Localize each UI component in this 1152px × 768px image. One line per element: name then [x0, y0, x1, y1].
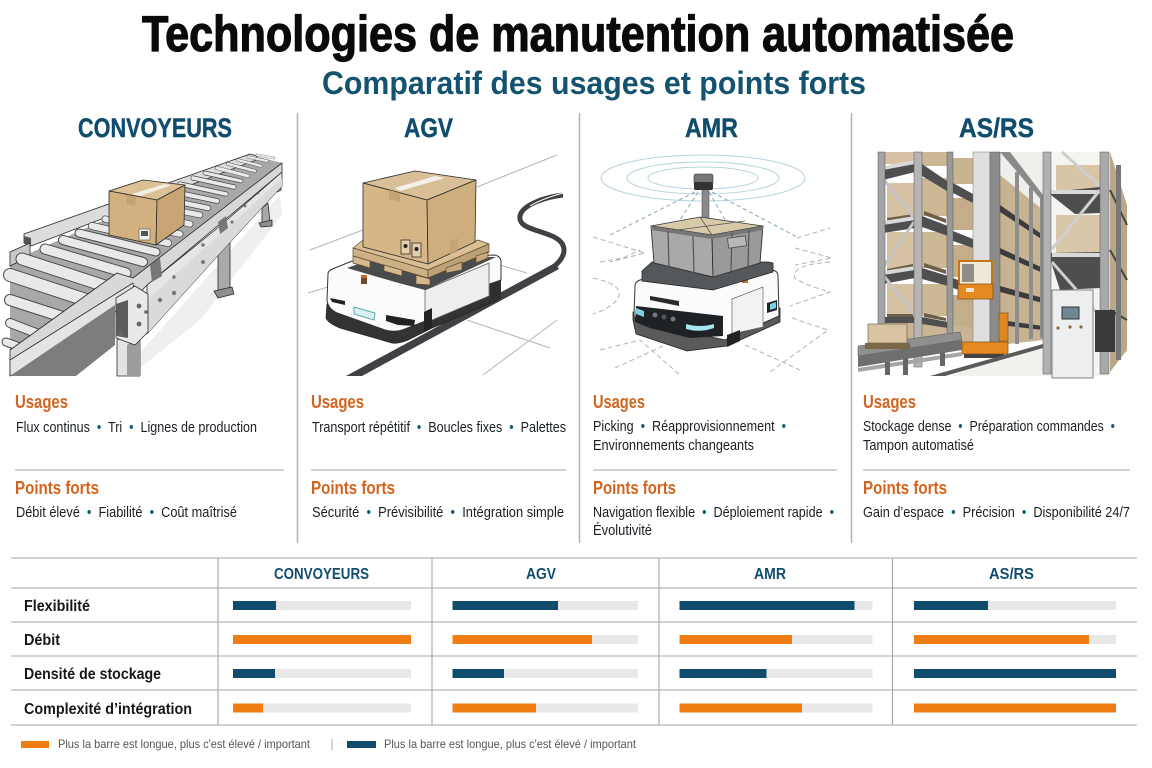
title: Technologies de manutention automatisée	[142, 6, 1014, 62]
cardboard box on pallet	[363, 171, 476, 264]
usages list: Stockage dense • Préparation commandes •	[863, 419, 1115, 435]
table header: agv: AGV	[526, 566, 557, 583]
usages list: Transport répétitif • Boucles fixes • Palettes	[312, 420, 566, 436]
wooden pallet	[353, 240, 489, 285]
legend swatch: navy	[347, 741, 376, 748]
mast	[973, 152, 1000, 347]
usages list line 2: Environnements changeants	[593, 438, 754, 454]
points forts heading: Points forts	[15, 478, 99, 498]
panel: as/rs	[858, 113, 1130, 521]
platform	[642, 262, 773, 290]
pallet load	[865, 324, 910, 349]
points forts list line 2: Évolutivité	[593, 522, 652, 539]
bar chart: agv	[452, 601, 638, 712]
lidar sensor	[694, 174, 713, 220]
control cabinet	[1052, 290, 1093, 378]
orange shuttle base	[962, 313, 1008, 358]
panel: agv	[308, 113, 566, 521]
comparison table	[11, 558, 1137, 725]
cardboard box	[109, 180, 185, 245]
heading: agv: AGV	[404, 113, 453, 143]
illustration: agv with pallet	[308, 155, 564, 376]
table header: amr: AMR	[754, 566, 786, 583]
usages heading: Usages	[593, 392, 645, 412]
legend text: navy: Plus la barre est longue, plus c'est élevé / important	[384, 737, 637, 751]
table header: convoyeurs: CONVOYEURS	[274, 566, 369, 583]
points forts heading: Points forts	[311, 478, 395, 498]
panel: convoyeurs	[6, 113, 284, 521]
usages heading: Usages	[311, 392, 364, 412]
points forts list: Gain d’espace • Précision • Disponibilité 24/7	[863, 505, 1130, 521]
table header: as/rs: AS/RS	[989, 566, 1034, 583]
points forts heading: Points forts	[863, 478, 947, 498]
points forts list: Sécurité • Prévisibilité • Intégration simple	[312, 505, 564, 521]
bar chart: convoyeurs	[233, 601, 411, 712]
braces	[884, 180, 914, 314]
bracket	[116, 286, 148, 345]
robot body	[633, 270, 780, 351]
guide track	[346, 193, 564, 376]
panel: amr	[593, 113, 837, 539]
near rail	[10, 163, 282, 376]
illustration: amr with lidar	[593, 155, 832, 375]
infeed conveyor	[858, 332, 1043, 376]
rollers	[6, 155, 274, 347]
legend text: orange: Plus la barre est longue, plus c'est élevé / important	[58, 737, 311, 751]
legend swatch: orange	[21, 741, 49, 748]
usages list: Picking • Réapprovisionnement •	[593, 419, 786, 435]
row label: densité de stockage: Densité de stockage	[24, 666, 161, 683]
heading: convoyeurs: CONVOYEURS	[78, 113, 232, 143]
bar chart: amr	[680, 601, 872, 712]
points forts list: Débit élevé • Fiabilité • Coût maîtrisé	[16, 505, 237, 521]
illustration: automated storage rack	[858, 152, 1127, 378]
side plate	[147, 172, 282, 334]
left rack boxes	[885, 152, 973, 345]
heading: as/rs: AS/RS	[959, 113, 1034, 143]
usages heading: Usages	[863, 392, 916, 412]
left rack uprights	[878, 152, 953, 367]
orange cabin	[958, 261, 993, 299]
left rack shelves	[883, 162, 973, 328]
usages list: Flux continus • Tri • Lignes de production	[16, 420, 257, 436]
right rack	[1043, 152, 1127, 374]
far rail	[24, 154, 257, 246]
row label: complexité d'intégration: Complexité d’intégration	[24, 701, 192, 718]
points forts heading: Points forts	[593, 478, 676, 498]
roller bed	[10, 155, 282, 372]
legs	[218, 240, 230, 296]
usages list line 2: Tampon automatisé	[863, 438, 974, 454]
illustration: roller conveyor	[6, 154, 282, 376]
grey crate	[651, 217, 763, 277]
subtitle: Comparatif des usages et points forts	[322, 65, 866, 101]
points forts list: Navigation flexible • Déploiement rapide •	[593, 505, 834, 521]
robot base	[326, 255, 501, 343]
legend	[21, 737, 637, 751]
heading: amr: AMR	[685, 113, 738, 143]
bar chart: as/rs	[914, 601, 1116, 712]
row label: flexibilité: Flexibilité	[24, 598, 90, 615]
row label: débit: Débit	[24, 632, 60, 649]
far rack aisle	[1000, 152, 1047, 345]
usages heading: Usages	[15, 392, 68, 412]
